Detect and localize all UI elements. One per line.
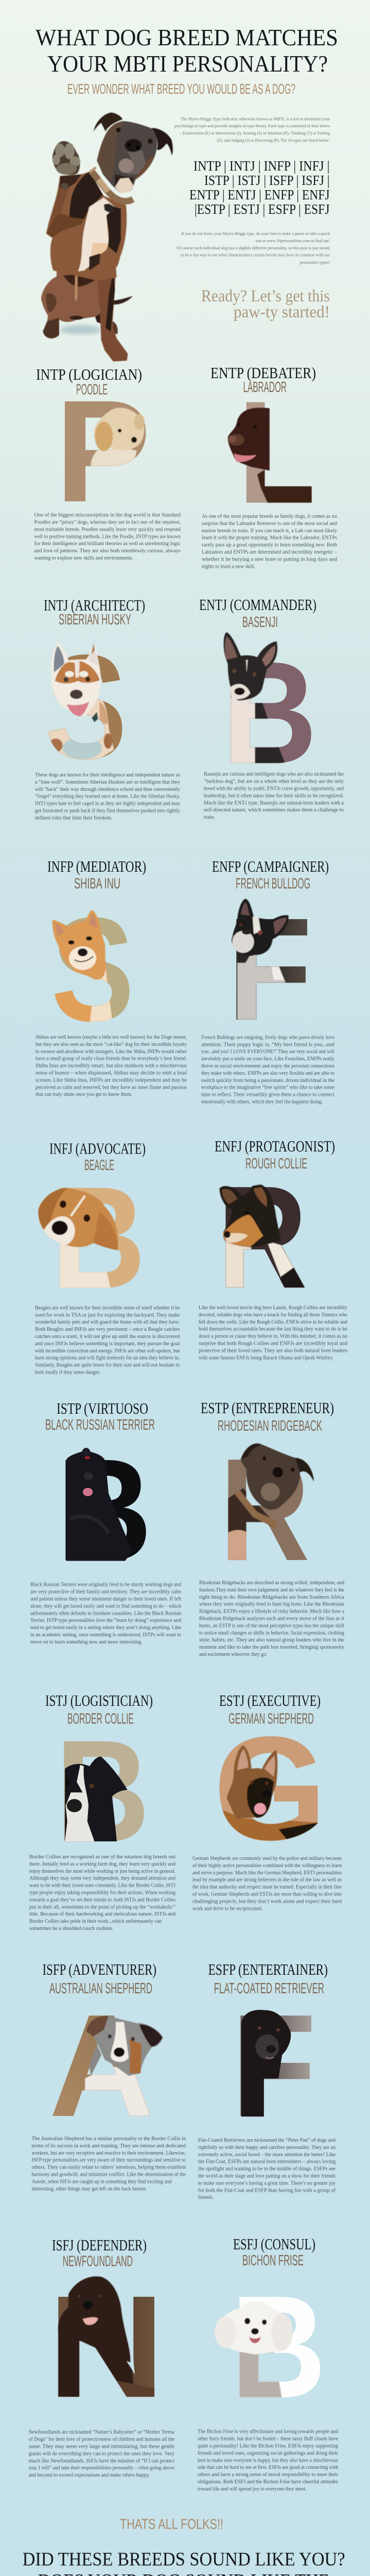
- description: and love of patterns. They are also both relentlessly curious, always: [34, 548, 181, 554]
- description: obligations. Both ESFJ and the Bichon Frise have cheerful attitudes: [198, 2479, 338, 2485]
- intro note: test at www.16personalities.com to find out!: [256, 239, 330, 243]
- letter B: B: [55, 1710, 150, 1872]
- icon: husky: [45, 641, 114, 764]
- description: most trainable breeds. Poodles usually learn very quickly and respond: [34, 527, 181, 532]
- description: Flat-Coated Retrievers are nicknamed the “Peter Pan” of dogs and: [198, 2138, 336, 2143]
- description: [201, 1035, 335, 1105]
- icon: labrador: [228, 408, 311, 503]
- description: [34, 513, 181, 561]
- icon: french bulldog: [232, 899, 289, 1021]
- icon: border collie: [65, 1757, 128, 1841]
- description: alone, they will get bored easily and want to find something to do – which: [30, 1603, 181, 1609]
- panel: ISTP black russian terrier: [30, 1399, 182, 1645]
- panel: ESTP rhodesian ridgeback: [199, 1399, 345, 1657]
- description: Terrier, ISTP type personalities love the “learn by doing” experience and: [30, 1618, 181, 1623]
- description: quite a personality! Like the Bichon Frise, ESFJs enjoy supporting: [198, 2443, 338, 2449]
- description: As one of the most popular breeds as family dogs, it comes as no: [202, 514, 337, 519]
- description: workers, but are very receptive and reactive to their environment. Likewise,: [32, 2150, 186, 2156]
- description: whether it be burying a new bone or putting in long days and: [202, 556, 337, 562]
- description: [29, 1854, 175, 1931]
- description: The Bichon Frise is very affectionate and loving towards people and: [198, 2429, 338, 2435]
- breed name: SHIBA INU: [74, 876, 120, 892]
- description: ISFP type personalities are very aware of their surroundings and sensitive to: [32, 2158, 186, 2163]
- description: with some famous ENFJs being Barack Obama and Oprah Winfrey.: [199, 1355, 333, 1361]
- closing subtitle: THATS ALL FOLKS!!: [120, 2516, 223, 2532]
- intro text: (F), and Judging (J) or Perceiving (P). The 16 types are listed below:: [217, 138, 330, 143]
- description: interesting, other things may get left on the back burner.: [32, 2186, 147, 2192]
- intro note: to be a fun way to see what characteristics certain breeds may have in common with our: [181, 252, 330, 258]
- description: have a small group of really close friends than be everybody’s best friend.: [36, 1056, 187, 1062]
- description: get frustrated or push back if they find themselves pushed into tightly: [35, 808, 180, 814]
- description: French Bulldogs are outgoing, lively dogs who paws-itively love: [201, 1035, 335, 1040]
- description: hold themselves accountable because the last thing they want to do is let: [199, 1327, 347, 1332]
- description: Much like the ENTJ type, Basenjis are natural-born leaders with a: [204, 800, 344, 806]
- description: for both the Flat-Coat and ESFP than having fun with a group of: [198, 2188, 336, 2193]
- icon: rhodesian ridgeback: [228, 1444, 314, 1563]
- description: side that can be hard to see at first. ESFJs are good at connecting with: [198, 2465, 338, 2470]
- description: catches onto a scent, it will not give up until the source is discovered: [35, 1334, 180, 1340]
- panel: INFP shiba inu: [36, 857, 187, 1097]
- description: style, habits, etc. They are also natural group leaders who live in the: [199, 1637, 345, 1643]
- description: to notice small changes or shifts in behavior, facial expression, clothing: [199, 1630, 344, 1636]
- letter S: S: [45, 624, 127, 790]
- description: and serve a purpose. Much like the German Shepherd, ESTJ personalities: [192, 1870, 342, 1876]
- description: leadership, but it often takes time for their skills to be recognized.: [204, 793, 344, 799]
- letter N: N: [47, 2265, 165, 2428]
- heading: INFJ (ADVOCATE): [49, 1139, 146, 1157]
- description: [192, 1856, 342, 1911]
- description: “barkless dog”, but are on a whole other level as they are the only: [204, 779, 344, 785]
- title: WHAT DOG BREED MATCHES: [36, 24, 338, 50]
- description: Both Beagles and INFJs are very persistent – once a Beagle catches: [35, 1327, 180, 1332]
- breed name: BICHON FRISE: [242, 2252, 304, 2269]
- description: enjoy themselves the most while working or just being active in general.: [29, 1869, 175, 1874]
- description: Ridgeback, ESTPs enjoy a lifestyle of risky behavior. Much like how a: [199, 1609, 345, 1615]
- description: [198, 2429, 339, 2492]
- description: hunts, an ESTP is one of the most perceptive types has the unique skill: [199, 1623, 344, 1629]
- breed name: NEWFOUNDLAND: [63, 2253, 133, 2270]
- description: surprise that the Labrador Retriever is one of the most social and: [202, 521, 337, 527]
- list of 16 types: ENTP | ENTJ | ENFP | ENFJ: [189, 187, 329, 202]
- panel: ISFJ newfoundland: [29, 2236, 175, 2478]
- description: Basenjis are curious and intelligent dogs who are also nicknamed the: [204, 772, 344, 777]
- description: are very protective of their family and territory. They are incredibly calm: [30, 1589, 181, 1595]
- letter F: F: [231, 1984, 316, 2147]
- intro note: If you do not know your Myers-Briggs type, do your best to make a guess or take a quick: [181, 231, 330, 236]
- description: they make with others. ENFPs are also very flexible and are able to: [201, 1071, 334, 1076]
- list of 16 types: |ESTP | ESTJ | ESFP | ESFJ: [195, 201, 329, 217]
- description: wanting to explore new skills and environments.: [34, 555, 133, 561]
- heading: ISTP (VIRTUOSO: [57, 1399, 148, 1417]
- description: workplace to the imaginative “free spirits” who like to take some: [201, 1085, 335, 1091]
- description: type people enjoy taking responsibility for their actions. When working: [29, 1890, 175, 1896]
- description: want to be with their loved ones constantly. Like the Border Collie, ISTJ: [29, 1883, 175, 1889]
- description: that can truly shine once you get to know them.: [36, 1092, 132, 1097]
- icon: black russian terrier: [66, 1448, 132, 1561]
- description: sense of humor – when displeased, Shibas may decide to emit a loud: [36, 1071, 187, 1076]
- description: INTJ types hate to feel caged in as they are highly independent and may: [35, 801, 180, 807]
- description: will “hack” their way through obedience school and then conveniently: [35, 787, 180, 792]
- description: defined roles that limit their freedom.: [35, 815, 112, 821]
- icon: beagle: [38, 1188, 118, 1290]
- description: title. Because of their hardworking and meticulous nature, ISTJs and: [29, 1911, 175, 1917]
- description: wonderful family pets and will guard the home with all that they have.: [35, 1319, 180, 1325]
- description: and patient unless they sense imminent danger to their loved ones. If left: [30, 1596, 181, 1602]
- description: rightfully so with their happy and carefree personality. They are an: [198, 2145, 336, 2150]
- closing heading: DID THESE BREEDS SOUND LIKE YOU?: [23, 2549, 345, 2570]
- description: self-directed nature, which sometimes makes them a challenge to: [204, 807, 344, 813]
- letter B: B: [51, 1157, 146, 1318]
- icon: german shepherd: [218, 1745, 318, 1842]
- description: moment and like to take the path less traveled, bringing spontaneity: [199, 1645, 344, 1650]
- description: others. They can easily relate to others’ emotions, helping them establish: [32, 2165, 186, 2171]
- description: fell down the wells. Like the Rough Collie, ENFJs strive to be reliable and: [199, 1319, 347, 1325]
- breed name: BORDER COLLIE: [67, 1710, 134, 1727]
- panel: ESFJ bichon frise: [198, 2235, 339, 2492]
- intro note: [177, 231, 330, 265]
- title: [36, 24, 338, 77]
- breed name: FRENCH BULLDOG: [236, 876, 310, 892]
- description: thrive in social environments and enjoy the personal connections: [201, 1063, 334, 1069]
- description: sometimes be a shredded couch cushion.: [29, 1926, 113, 1931]
- breed name: BLACK RUSSIAN TERRIER: [45, 1417, 155, 1433]
- description: [202, 514, 338, 569]
- description: move on to learn something new and more interesting.: [30, 1639, 143, 1645]
- description: you, I will” and take their responsibilities personally – often going above: [29, 2465, 175, 2471]
- panel: ENFJ rough collie: [199, 1137, 347, 1361]
- description: to owners and aloofness with strangers. Like the Shiba, INFPs would rather: [36, 1049, 187, 1055]
- description: the world as their stage and love putting on a show for their friends: [198, 2173, 336, 2179]
- panel: INTP poodle: [34, 365, 181, 561]
- breed name: POODLE: [76, 381, 108, 398]
- description: Beagles are well known for their incredible sense of smell whether it be: [35, 1305, 180, 1311]
- description: devoted, reliable dogs who have a knack for finding all those Timmys who: [199, 1312, 347, 1318]
- panel: INTJ siberian husky: [35, 596, 180, 821]
- icon: basenji: [224, 632, 286, 765]
- description: lead by example and are strong believers in the rule of the law as well as: [192, 1877, 342, 1883]
- intro note: Of course each individual dog has a slightly different personality, so this post is just meant: [177, 246, 330, 250]
- description: bark loudly if they sense danger.: [35, 1369, 100, 1376]
- heading: ISFP (ADVENTURER): [42, 1960, 156, 1978]
- letter F: F: [227, 888, 312, 1050]
- list of 16 types: ISTP | ISTJ | ISFP | ISFJ |: [204, 173, 329, 188]
- description: well to positive training methods. Like the Poodle, INTP types are known: [34, 534, 181, 539]
- icon: poodle: [91, 408, 145, 467]
- description: Rhodesian Ridgeback analyzes each and every move of the lion as it: [199, 1616, 344, 1622]
- description: [30, 1582, 182, 1645]
- icon: flat-coated retriever: [241, 2010, 291, 2116]
- panel: ESTJ german shepherd: [192, 1691, 342, 1911]
- description: harmony and goodwill, and minimize conflict. Like the determination of the: [32, 2172, 186, 2177]
- heading: INTP (LOGICIAN): [36, 365, 142, 383]
- letter S: S: [51, 887, 134, 1052]
- description: of Dogs” for their love of protectiveness of children and humans all the: [29, 2437, 175, 2443]
- callout: ready: [201, 287, 330, 321]
- description: inevitably put a smile on your face. Like Frenchies, ENFPs really: [201, 1056, 334, 1062]
- breed name: SIBERIAN HUSKY: [59, 612, 131, 628]
- description: same. They may seem very large and intimidating, but these gentle: [29, 2444, 175, 2449]
- description: you...and you! I LOVE EVERYONE!” They are very social and will: [201, 1049, 334, 1055]
- description: switch quickly from being a passionate, driven individual in the: [201, 1078, 335, 1083]
- description: the idea that authority and respect must be earned. Especially in their line: [192, 1885, 342, 1890]
- heading: INTJ (ARCHITECT): [44, 596, 145, 614]
- description: Black Russian Terriers were originally bred to be sturdy working dogs and: [30, 1582, 181, 1588]
- panel: ENFP french bulldog: [201, 857, 335, 1105]
- panel: INFJ beagle: [35, 1139, 180, 1376]
- description: [199, 1305, 347, 1361]
- description: [199, 1580, 345, 1657]
- intro text: – Extraversion (E) or Introversion (I), Sensing (S) or Intuition (N), Thinking (T) or Feeling: [179, 131, 330, 135]
- description: time to reflect. Their versatility gives them a chance to connect: [201, 1092, 334, 1098]
- description: Like the well-loved movie dog hero Lassie, Rough Collies are incredibly: [199, 1305, 347, 1311]
- description: of their highly active personalities combined with the willingness to learn: [192, 1863, 342, 1869]
- panel: ISTJ border collie: [29, 1691, 175, 1931]
- description: the spotlight and wanting to be in the middle of things. ESFPs see: [198, 2166, 336, 2172]
- letter L: L: [238, 371, 315, 534]
- description: perceived as calm and reserved, but they have an inner flame and passion: [36, 1084, 187, 1090]
- description: Shibas are well known (maybe a little too well known) for the Doge meme,: [36, 1035, 187, 1040]
- description: Although they may seem very independent, they demand attention and: [29, 1876, 175, 1882]
- panel: ENTP labrador: [202, 364, 338, 569]
- title: YOUR MBTI PERSONALITY?: [47, 50, 328, 77]
- description: and excitement wherever they go.: [199, 1652, 268, 1657]
- heading: ISTJ (LOGISTICIAN): [45, 1691, 153, 1709]
- description: to make sure everyone’s having a great time. There’s no greater joy: [198, 2180, 336, 2186]
- description: nights to learn a new skill.: [202, 564, 255, 569]
- description: Border Collies take pride in their work...which unfortunately can: [29, 1919, 162, 1924]
- description: friends and loved ones, organizing social gatherings and doing their: [198, 2450, 339, 2456]
- description: and beyond to exceed expectations and make others happy.: [29, 2472, 150, 2478]
- intro note: personality types!: [299, 260, 330, 265]
- description: have strong opinions and will fight tirelessly for an idea they believe in.: [35, 1355, 180, 1361]
- heading: ENTP (DEBATER): [210, 364, 316, 382]
- icon: bichon frise: [214, 2302, 293, 2399]
- description: there. Initially bred as a working farm dog, they learn very quickly and: [29, 1861, 175, 1867]
- intro text: [174, 116, 330, 143]
- heading: ESTJ (EXECUTIVE): [219, 1691, 321, 1709]
- description: other furry friends, but don’t be fooled – these sassy fluff clouds have: [198, 2436, 339, 2442]
- description: and once INFJs believe something is important, they pursue the goal: [35, 1341, 180, 1347]
- description: for their intelligence and brilliant theories as well as unrelenting logic: [34, 541, 181, 547]
- description: [35, 1305, 180, 1376]
- description: down a person or cause they believe in. With this mindset, it comes as no: [199, 1334, 347, 1340]
- description: best to make sure everyone is happy, but they also have a mischievous: [198, 2458, 338, 2463]
- description: unfortunately often defaults to furniture casualties. Like the Black Russian: [30, 1611, 181, 1616]
- description: These dogs are known for their intelligence and independent nature as: [35, 772, 180, 778]
- description: work and drive to be reciprocated.: [192, 1906, 262, 1911]
- list of 16 types: [189, 158, 329, 217]
- panel: ISFP australian shepherd: [32, 1960, 186, 2192]
- heading: ENFP (CAMPAIGNER): [212, 857, 329, 875]
- letter R: R: [217, 1156, 307, 1318]
- description: Shiba Inus are incredibly smart, but also stubborn with a mischievous: [36, 1063, 187, 1069]
- description: Labradors and ENTPs are determined and incredibly energetic –: [202, 549, 338, 555]
- description: [35, 772, 180, 821]
- description: [204, 772, 344, 820]
- callout: ready: paw-ty started!: [234, 303, 330, 321]
- intro text: The Myers-Briggs Type Indicator, otherwise known as MBTI, is a test to determine your: [181, 116, 330, 121]
- description: “forget” everything they learned once at home. Like the Siberian Husky,: [35, 794, 180, 800]
- description: in an academic setting, once something is understood, ISTPs will want to: [30, 1632, 181, 1638]
- description: right thing to do. Rhodesian Ridgebacks are from Southern Africa: [199, 1595, 345, 1600]
- letter B: B: [231, 2266, 326, 2429]
- description: emotionally with others, which they feel the happiest doing.: [201, 1099, 323, 1105]
- description: of work, German Shepherds and ESTJs are more than willing to dive into: [192, 1892, 342, 1897]
- description: the Flat-Coat, ESFPs are natural born entertainers – always loving: [198, 2159, 336, 2165]
- letter G: G: [214, 1706, 327, 1871]
- description: towards a goal they’ve set their minds to, both ISTJs and Border Collies: [29, 1897, 175, 1903]
- description: others and have a strong sense of moral responsibility to meet their: [198, 2472, 339, 2478]
- description: German Shepherds are commonly used by the police and military because: [192, 1856, 342, 1861]
- description: friends.: [198, 2195, 214, 2200]
- description: giants will do everything they can to protect the ones they love. Very: [29, 2451, 174, 2456]
- description: where they were originally bred to hunt big lions. Like the Rhodesian: [199, 1602, 344, 1607]
- description: challenging projects, but they don’t work alone and expect their hard: [192, 1899, 342, 1904]
- heading: ISFJ (DEFENDER): [52, 2236, 147, 2254]
- heading: ESFJ (CONSUL): [233, 2235, 315, 2253]
- list of 16 types: INTP | INTJ | INFP | INFJ |: [193, 158, 329, 174]
- description: learn it with the proper training. Much like the Labrador, ENTPs: [202, 535, 337, 541]
- panel: INFJ beagle: BEAGLE: [84, 1157, 114, 1174]
- description: [29, 2430, 175, 2478]
- description: but they are also seen as the most “cat-like” dog for their incredible loyalty: [36, 1042, 187, 1047]
- letter P: P: [55, 370, 151, 532]
- callout: ready: Ready? Let’s get this: [201, 287, 330, 306]
- description: One of the biggest misconceptions in the dog world is that Standard: [34, 513, 181, 518]
- description: extremely active, social breed – the more attention the better! Like: [198, 2152, 336, 2158]
- description: [32, 2136, 186, 2192]
- description: The Australian Shepherd has a similar personality to the Border Collie in: [32, 2136, 186, 2142]
- description: Similarly, Beagles are quite brave for their size and will not hesitate to: [35, 1363, 180, 1368]
- breed name: BASENJI: [242, 614, 278, 631]
- description: rarely pass up a good opportunity to learn something new. Both: [202, 543, 337, 548]
- description: Poodles are “prissy” dogs, whereas they are in fact one of the smartest,: [34, 519, 181, 526]
- heading: INFP (MEDIATOR): [47, 857, 146, 875]
- description: protective of their loved ones. They are also both natural born leaders: [199, 1348, 347, 1353]
- icon: newfoundland: [57, 2276, 156, 2399]
- description: scream. Like Shiba Inus, INFPs are incredibly independent and may be: [36, 1077, 187, 1083]
- icon: shiba: [51, 910, 113, 1025]
- intro text: psychological type and provide insights of type theory. Each type is consisted of four letters: [174, 124, 330, 128]
- panel: ESFP flat-coated retriever: [198, 1960, 336, 2200]
- description: fearless.They trust their own judgement and do whatever they feel is the: [199, 1587, 345, 1593]
- description: with incredible conviction and energy. INFJs are often soft-spoken, but: [35, 1348, 180, 1354]
- description: Rhodesian Ridgebacks are described as strong willed, independent, and: [199, 1580, 344, 1586]
- description: put in their all, sometimes to the point of picking up the “workaholic”: [29, 1904, 175, 1910]
- panel: ENTJ basenji: [199, 596, 344, 820]
- description: toward life and will spread joy to everyone they meet.: [198, 2486, 306, 2492]
- description: Border Collies are recognized as one of the smartest dog breeds out: [29, 1854, 175, 1860]
- description: [198, 2138, 336, 2200]
- breed name: ROUGH COLLIE: [245, 1156, 307, 1172]
- description: used for work in TSA or just for exploring the backyard. They make: [35, 1312, 180, 1318]
- description: Aussie, when ISFJs are caught up in something they find exciting and: [32, 2179, 172, 2184]
- breed name: AUSTRALIAN SHEPHERD: [49, 1980, 152, 1997]
- icon: rough collie: [220, 1184, 311, 1290]
- description: easiest breeds to train. If you can teach it, a Lab can most likely: [202, 528, 337, 534]
- heading: ENTJ (COMMANDER): [199, 596, 316, 614]
- description: attention. Their puppy logic is, “My best friend is you...and: [201, 1042, 334, 1047]
- description: terms of its success in work and training. They are intense and dedicated: [32, 2143, 186, 2149]
- heading: ESFP (ENTERTAINER): [208, 1960, 328, 1978]
- icon: australian shepherd: [85, 2016, 163, 2118]
- letter R: R: [220, 1428, 310, 1591]
- breed name: LABRADOR: [243, 379, 287, 396]
- description: surprise that both Rough Collies and ENFJs are incredibly loyal and: [199, 1341, 347, 1347]
- description: much like Newfoundlands, ISFJs have the mindset of “If I can protect: [29, 2458, 174, 2464]
- description: tend to get bored easily in a setting where they aren’t doing anything. Like: [30, 1625, 182, 1631]
- description: Newfoundlands are nicknamed “Nature’s Babysitter” or “Mother Teresa: [29, 2430, 175, 2435]
- icon: hero dog raising paw: [41, 112, 173, 362]
- letter B: B: [222, 631, 317, 794]
- description: breed with the ability to yodel. ENTJs crave growth, opportunity, and: [204, 786, 344, 791]
- letter A: A: [49, 1984, 154, 2147]
- description: a “lone wolf”. Sometimes Siberian Huskies are so intelligent that they: [35, 779, 180, 785]
- description: train.: [204, 815, 215, 820]
- letter B: B: [57, 1429, 152, 1592]
- description: [36, 1035, 187, 1097]
